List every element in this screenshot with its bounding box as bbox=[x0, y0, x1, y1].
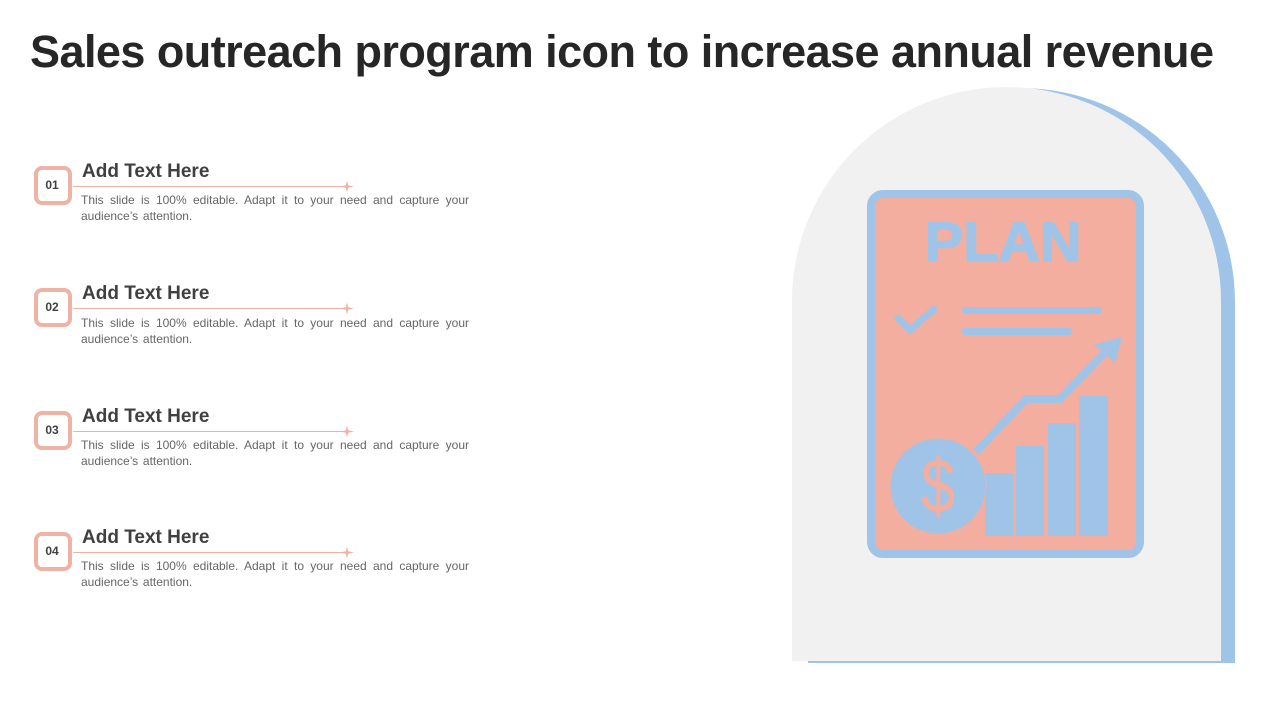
growth arrow bbox=[976, 337, 1122, 452]
icon: dollar coin bbox=[890, 438, 986, 534]
item description 02: This slide is 100% editable. Adapt it to your need and capture your bbox=[81, 316, 469, 330]
number badge 04 bbox=[34, 532, 72, 571]
check mark bbox=[898, 309, 934, 330]
item heading 03: Add Text Here bbox=[82, 406, 209, 427]
item heading 01: Add Text Here bbox=[82, 161, 209, 182]
item description 01: This slide is 100% editable. Adapt it to your need and capture your bbox=[81, 193, 469, 207]
item heading 02: Add Text Here bbox=[82, 283, 209, 304]
title: Sales outreach program icon to increase annual revenue bbox=[30, 26, 1214, 77]
document page bbox=[871, 194, 1140, 554]
icon: dollar coin: $ bbox=[921, 444, 955, 529]
bar chart bbox=[985, 396, 1108, 536]
PLAN label: PLAN bbox=[925, 212, 1081, 274]
number badge 01 bbox=[34, 166, 72, 205]
arch panel: light grey bbox=[792, 87, 1221, 661]
number badge 03: 03 bbox=[45, 423, 59, 437]
item heading 04: Add Text Here bbox=[82, 527, 209, 548]
rule with star 04 bbox=[73, 546, 354, 558]
item description 04 bbox=[81, 559, 469, 589]
rule with star 03 bbox=[73, 426, 354, 438]
number badge 02: 02 bbox=[45, 300, 59, 314]
checklist line 2 bbox=[962, 328, 1072, 335]
number badge 04: 04 bbox=[45, 544, 59, 558]
item description 04: audience’s attention. bbox=[81, 575, 192, 589]
item description 01 bbox=[81, 193, 469, 223]
item description 02: audience’s attention. bbox=[81, 332, 192, 346]
icon: sales plan document bbox=[871, 194, 1140, 554]
number badge 02 bbox=[34, 288, 72, 327]
item description 03 bbox=[81, 438, 469, 468]
number badge 01: 01 bbox=[45, 178, 59, 192]
list item 04 bbox=[34, 527, 469, 589]
item description 01: audience’s attention. bbox=[81, 209, 192, 223]
number badge 03 bbox=[34, 411, 72, 450]
list item 03 bbox=[34, 406, 469, 468]
rule with star 02 bbox=[73, 302, 354, 314]
checklist line 1 bbox=[962, 307, 1102, 314]
item description 04: This slide is 100% editable. Adapt it to your need and capture your bbox=[81, 559, 469, 573]
item description 03: This slide is 100% editable. Adapt it to your need and capture your bbox=[81, 438, 469, 452]
arch shadow: blue bbox=[808, 88, 1235, 663]
rule with star 01 bbox=[73, 180, 354, 192]
item description 03: audience’s attention. bbox=[81, 454, 192, 468]
item description 02 bbox=[81, 316, 469, 346]
list item 01 bbox=[34, 161, 469, 223]
list item 02 bbox=[34, 283, 469, 346]
